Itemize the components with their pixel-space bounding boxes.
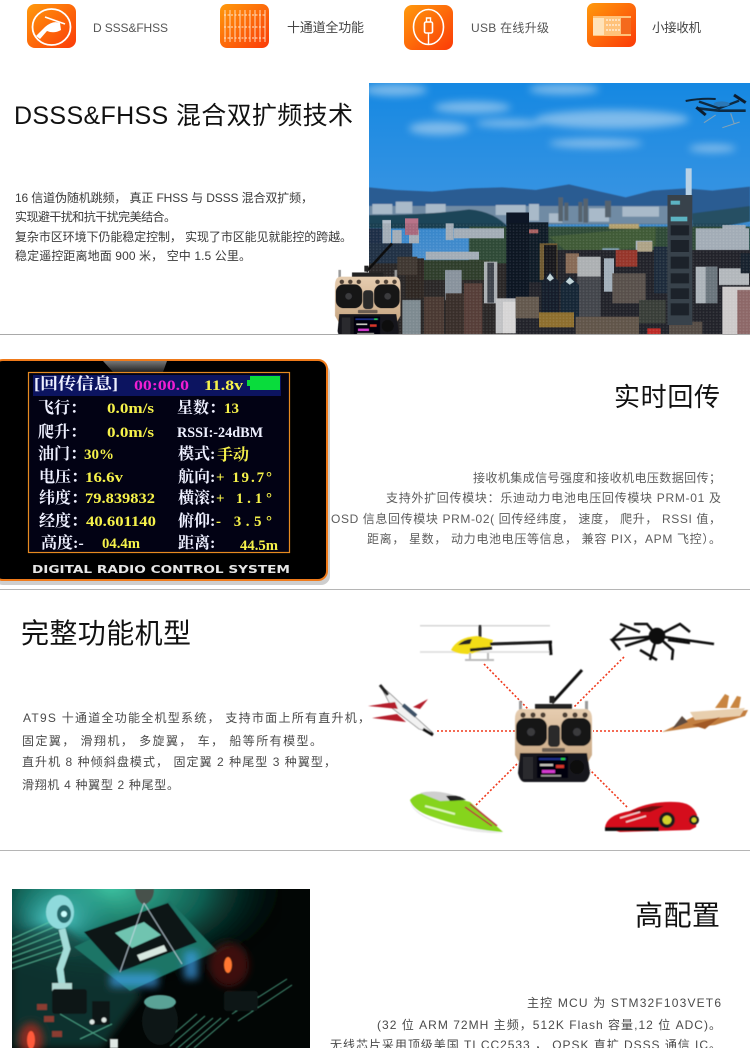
text block: DSSS description: 实现避干扰和抗干扰完美结合。 bbox=[15, 209, 176, 224]
text block: DSSS description: 16 信道伪随机跳频， 真正 FHSS 与 DSSS 混合双扩频， bbox=[15, 190, 313, 205]
diagram: remote linked to models bbox=[368, 624, 748, 833]
text block: telemetry description: 距离， 星数， 动力电池电压等信息， 兼容 PIX，APM 飞控）。 bbox=[367, 531, 721, 546]
image: circuit board and robot bbox=[12, 889, 310, 1048]
icon: speedboat bbox=[410, 792, 503, 833]
text block: model description: 固定翼， 滑翔机， 多旋翼， 车， 船等所有模型。 bbox=[22, 733, 322, 748]
panel: high specification bbox=[12, 889, 720, 1048]
title: DSSS&FHSS: DSSS&FHSS 混合双扩频技术 bbox=[14, 102, 353, 130]
telemetry screen: + 19.7° bbox=[216, 470, 272, 486]
text block: telemetry description bbox=[331, 470, 721, 546]
telemetry screen: [回传信息] bbox=[34, 374, 118, 393]
telemetry screen: 电压： bbox=[39, 468, 87, 486]
feature icon row bbox=[27, 3, 701, 50]
telemetry screen: RSSI:-24dBM bbox=[177, 425, 263, 441]
label: small receiver: 小接收机 bbox=[652, 20, 701, 35]
text block: model description bbox=[22, 710, 370, 792]
icon: USB bbox=[404, 5, 453, 50]
icon: octocopter bbox=[612, 624, 714, 660]
label: USB online upgrade: USB 在线升级 bbox=[471, 21, 549, 35]
text block: telemetry description: 支持外扩回传模块：乐迪动力电池电压回传模块 PRM-01 及 bbox=[386, 490, 721, 505]
label: ten channels: 十通道全功能 bbox=[287, 20, 364, 35]
telemetry screen: - 3.5° bbox=[216, 514, 272, 530]
telemetry screen: 16.6v bbox=[85, 470, 124, 486]
telemetry screen: 航向: bbox=[178, 468, 215, 486]
telemetry screen: 爬升： bbox=[38, 423, 86, 441]
telemetry screen: + 1.1° bbox=[216, 491, 272, 507]
telemetry screen: 11.8v bbox=[204, 378, 244, 394]
icon: helicopter bbox=[420, 625, 552, 660]
telemetry screen: 横滚: bbox=[178, 488, 215, 507]
telemetry screen: 俯仰: bbox=[178, 511, 215, 530]
text block: model description: 滑翔机 4 种翼型 2 种尾型。 bbox=[22, 778, 179, 792]
text block: model description: AT9S 十通道全功能全机型系统， 支持市面上所有直升机， bbox=[23, 710, 370, 725]
telemetry screen: 距离: bbox=[178, 533, 215, 552]
image: city skyline with drone bbox=[369, 83, 750, 334]
telemetry screen: 04.4m bbox=[102, 536, 140, 552]
telemetry screen: 星数： bbox=[177, 398, 225, 417]
text block: spec description bbox=[330, 996, 721, 1048]
icon: red sports car bbox=[605, 802, 699, 832]
telemetry screen: 40.601140 bbox=[86, 514, 156, 530]
telemetry screen bbox=[0, 360, 330, 585]
telemetry screen: 79.839832 bbox=[85, 491, 155, 507]
panel: complete model types bbox=[21, 618, 748, 833]
label: DSSS&FHSS: D SSS&FHSS bbox=[93, 21, 168, 35]
text block: telemetry description: OSD 信息回传模块 PRM-02( 回传经纬度， 速度， 爬升， RSSI 值， bbox=[331, 511, 721, 526]
icon: helicopter DSSS bbox=[27, 4, 76, 48]
icon: ten channel grid bbox=[220, 4, 269, 48]
icon: right fighter jet bbox=[662, 694, 748, 732]
text block: spec description: (32 位 ARM 72MH 主频，512K Flash 容量,12 位 ADC)。 bbox=[377, 1017, 721, 1032]
telemetry screen: 高度:- bbox=[41, 533, 84, 552]
panel: DSSS and FHSS bbox=[14, 83, 750, 339]
telemetry screen: 0.0m/s bbox=[107, 401, 154, 417]
telemetry screen: 00:00.0 bbox=[134, 378, 189, 394]
panel: real-time telemetry bbox=[0, 360, 721, 585]
telemetry screen: DIGITAL RADIO CONTROL SYSTEM bbox=[32, 563, 290, 576]
text block: DSSS description: 稳定遥控距离地面 900 米， 空中 1.5 公里。 bbox=[15, 248, 251, 263]
telemetry screen: 纬度： bbox=[39, 488, 87, 507]
telemetry screen: 44.5m bbox=[240, 538, 278, 554]
title: model types: 完整功能机型 bbox=[21, 618, 191, 649]
text block: spec description: 主控 MCU 为 STM32F103VET6 bbox=[527, 996, 721, 1010]
text block: model description: 直升机 8 种倾斜盘模式， 固定翼 2 种尾型 3 种翼型， bbox=[22, 754, 336, 769]
telemetry screen: 模式: bbox=[178, 444, 215, 463]
icon: small receiver bbox=[587, 3, 636, 47]
icon: remote controller bbox=[335, 244, 400, 339]
telemetry screen: 0.0m/s bbox=[107, 425, 154, 441]
telemetry screen: 飞行： bbox=[38, 399, 86, 417]
telemetry screen: 13 bbox=[224, 401, 239, 417]
telemetry screen: 经度： bbox=[39, 511, 87, 530]
telemetry screen: 手动 bbox=[217, 445, 249, 464]
text block: DSSS description bbox=[15, 190, 352, 263]
icon: remote controller hub bbox=[515, 670, 592, 782]
telemetry screen: 30% bbox=[84, 447, 114, 463]
title: high specification: 高配置 bbox=[635, 900, 720, 931]
text block: telemetry description: 接收机集成信号强度和接收机电压数据回传； bbox=[473, 470, 721, 485]
telemetry screen: 油门： bbox=[38, 445, 86, 463]
text block: DSSS description: 复杂市区环境下仍能稳定控制， 实现了市区能见就能控的跨越。 bbox=[15, 229, 352, 244]
title: real-time telemetry: 实时回传 bbox=[614, 382, 720, 412]
icon: left fighter jet bbox=[368, 685, 433, 735]
